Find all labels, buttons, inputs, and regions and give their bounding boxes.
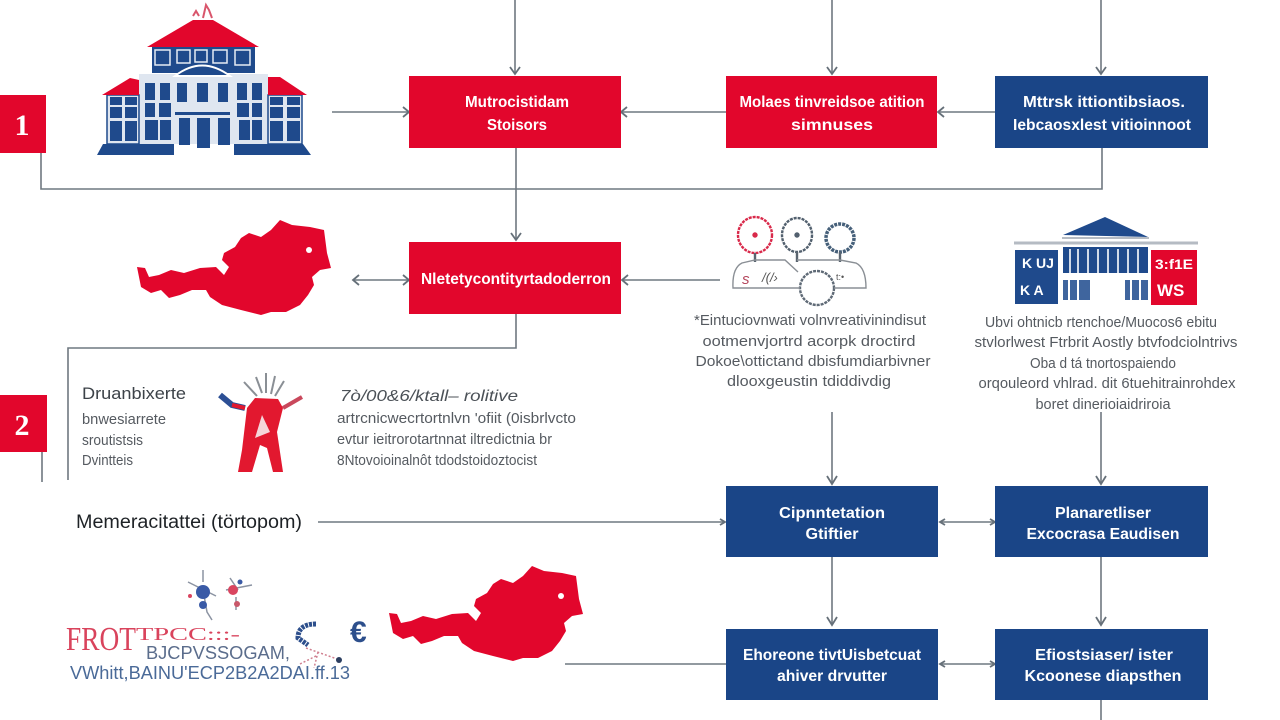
box: blue row 3 right: Excocrasa Eaudisen (1026, 526, 1180, 543)
box: blue row 3 left: Cipnntetation (779, 505, 885, 522)
icon: people group: /(/› (761, 270, 778, 285)
icon: people group (733, 217, 866, 305)
text block: building description (974, 314, 1238, 413)
box: red centre row: Nletetycontityrtadoderron (421, 271, 611, 288)
text block: bottom coloured lettering (66, 621, 350, 683)
text block: step 2 left list: Dvintteis (82, 452, 133, 469)
box: top red left (409, 76, 621, 148)
icon: people group: s (742, 271, 750, 288)
text block: step 2 left list (82, 384, 186, 469)
text block: building description: Oba d tá tnortospaiendo (1030, 355, 1176, 372)
box: top red middle: simnuses (791, 117, 873, 134)
icon: Austria map lower (389, 566, 583, 661)
text block: people description: *Eintuciovnwati volnvreativinindisut (694, 312, 927, 329)
box: top red middle: Molaes tinvreidsoe atition (740, 94, 924, 111)
icon: government building: K A (1020, 282, 1044, 298)
text block: bottom coloured lettering: TPCC:::- (136, 624, 240, 644)
step marker 2 (0, 395, 47, 452)
box: blue row 3 right: Planaretliser (1055, 505, 1151, 522)
text block: bottom coloured lettering: BJCPVSSOGAM, (146, 643, 290, 663)
icon: Austria map (137, 220, 331, 315)
box: top blue right: Mttrsk ittiontibsiaos. (1023, 94, 1185, 111)
text block: building description: Ubvi ohtnicb rtenchoe/Muocos6 ebitu (985, 314, 1217, 331)
box: top red middle (726, 76, 937, 148)
step marker 1: 1 (14, 109, 30, 142)
text block: people description: ootmenvjortrd acorpk droctird (702, 333, 916, 350)
box: blue row 3 left: Gtiftier (806, 526, 858, 543)
icon: government building: WS (1157, 281, 1184, 300)
text block: building description: orqouleord vhlrad. dit 6tuehitrainrohdex (978, 375, 1236, 392)
text block: building description: stvlorlwest Ftrbrit Aostly btvfodciolntrivs (974, 334, 1238, 351)
box: top red left: Mutrocistidam (465, 94, 569, 111)
text block: bottom coloured lettering: FROT (66, 621, 136, 658)
text block: step 2 left list: bnwesiarrete (82, 411, 166, 428)
icon: red figure (220, 373, 302, 472)
text block: step 2 right paragraph (337, 388, 576, 469)
text block: bottom coloured lettering: VWhitt,BAINU'ECP2B2A2DAI.ff.13 (70, 663, 350, 683)
step marker 2: 2 (14, 409, 30, 442)
box: blue row 4 left (726, 629, 938, 700)
icon: small figures and symbols: € (350, 616, 367, 649)
icon: government building: K UJ (1022, 255, 1054, 271)
icon: small figures and symbols (188, 570, 367, 668)
text block: people description (694, 312, 930, 390)
box: top red left: Stoisors (487, 117, 547, 134)
box: blue row 4 right (995, 629, 1208, 700)
label: bottom heading: Memeracitattei (törtopom) (76, 512, 302, 533)
box: blue row 3 right (995, 486, 1208, 557)
icon: people group: t:• (836, 272, 844, 282)
box: blue row 4 left: Ehoreone tivtUisbetcuat (743, 647, 922, 664)
box: blue row 3 left (726, 486, 938, 557)
text block: building description: boret dinerioiaidriroia (1036, 396, 1171, 413)
box: red centre row (409, 242, 621, 314)
icon: government building: 3:f1E (1155, 256, 1193, 272)
icon: government building (1014, 217, 1198, 305)
text block: step 2 right paragraph: 8Ntovoioinalnôt tdodstoidoztocist (337, 452, 538, 469)
box: blue row 4 left: ahiver drvutter (777, 668, 887, 685)
text block: step 2 right paragraph: evtur ieitrorotartnnat iltredictnia br (337, 431, 552, 448)
box: top blue right: Iebcaosxlest vitioinnoot (1013, 117, 1192, 134)
text block: people description: dlooxgeustin tdiddivdig (727, 373, 891, 390)
text block: step 2 right paragraph: artrcnicwecrtortnlvn 'ofiit (0isbrlvcto (337, 410, 576, 427)
box: blue row 4 right: Efiostsiaser/ ister (1035, 647, 1173, 664)
step marker 1 (0, 95, 46, 153)
text block: step 2 right paragraph: 7ò/00&6/ktall– rolitive (340, 388, 518, 405)
box: blue row 4 right: Kcoonese diapsthen (1024, 668, 1182, 685)
icon: parliament building (97, 5, 311, 155)
text block: step 2 left list: Druanbixerte (82, 384, 186, 403)
text block: step 2 left list: sroutistsis (82, 432, 143, 449)
box: top blue right (995, 76, 1208, 148)
text block: people description: Dokoe\ottictand dbisfumdiarbivner (696, 353, 930, 370)
